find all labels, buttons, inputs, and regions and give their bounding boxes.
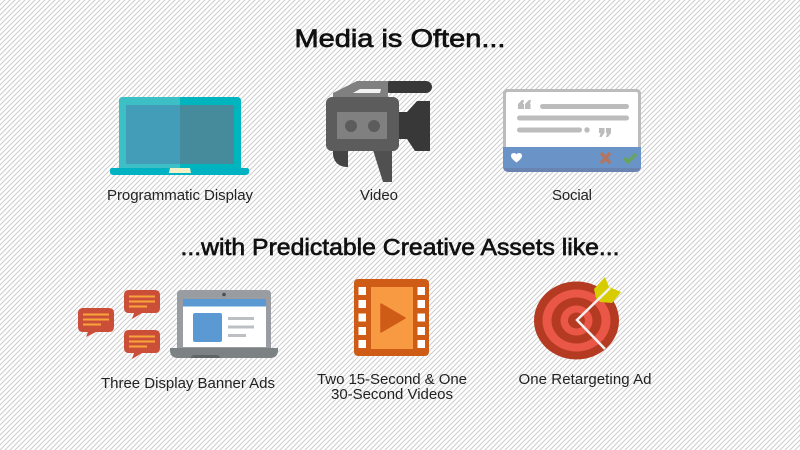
label: programmatic display: Programmatic Display xyxy=(107,187,254,204)
icon: film strip xyxy=(354,279,429,356)
icon: video camera xyxy=(326,81,432,182)
subheading: ...with Predictable Creative Assets like... xyxy=(180,234,620,260)
label: video assets: 30-Second Videos xyxy=(331,386,453,403)
bubble top xyxy=(124,290,160,319)
bubble left xyxy=(78,308,114,337)
title: Media is Often... xyxy=(294,25,506,53)
bubble bottom xyxy=(124,330,160,359)
icon: social card xyxy=(503,89,641,172)
icon: target with arrow xyxy=(534,277,621,360)
label: video assets xyxy=(317,371,467,403)
label: video assets: Two 15-Second & One xyxy=(317,371,467,388)
icon: laptop xyxy=(110,97,249,175)
label: one retargeting ad: One Retargeting Ad xyxy=(518,371,652,388)
label: three display banner ads: Three Display Banner Ads xyxy=(101,375,275,392)
laptop xyxy=(170,290,278,358)
label: video: Video xyxy=(360,187,398,204)
label: social: Social xyxy=(552,187,592,204)
icon: speech bubbles and laptop xyxy=(78,290,278,359)
